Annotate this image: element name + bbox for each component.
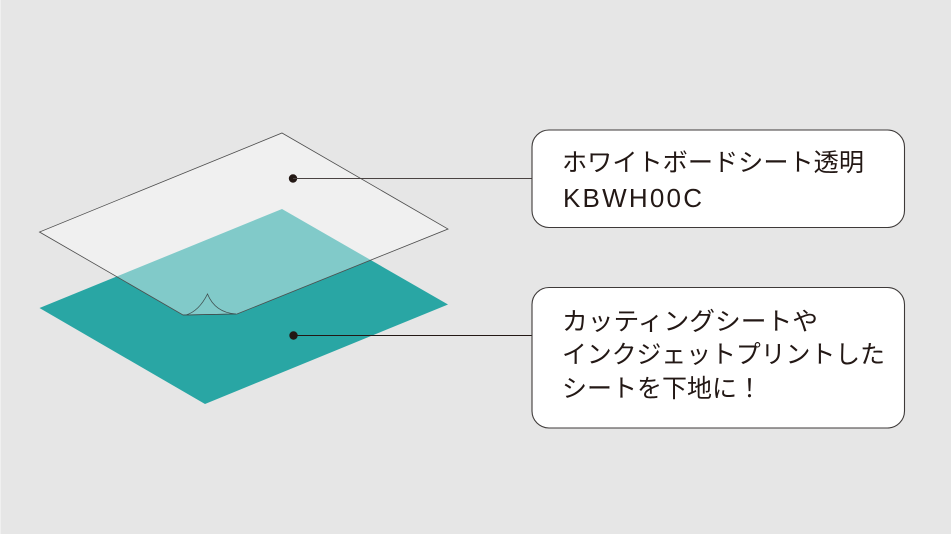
callout: whiteboard sheet xyxy=(532,130,904,228)
callout text: line 2: インクジェットプリントした xyxy=(562,341,885,369)
peeled corner xyxy=(183,294,236,315)
leader line: top sheet xyxy=(289,174,532,183)
callout: base sheet xyxy=(532,288,904,428)
callout text: line 1: カッティングシートや xyxy=(562,308,818,336)
transparent whiteboard sheet xyxy=(40,133,448,315)
callout text: line 3: シートを下地に！ xyxy=(562,375,762,403)
leader line: base sheet xyxy=(289,331,532,340)
callout text: product code: KBWH00C xyxy=(563,183,702,213)
teal base sheet xyxy=(40,209,448,404)
callout text: product name: ホワイトボードシート透明 xyxy=(562,149,864,177)
diagram: layered sheets xyxy=(40,133,448,404)
